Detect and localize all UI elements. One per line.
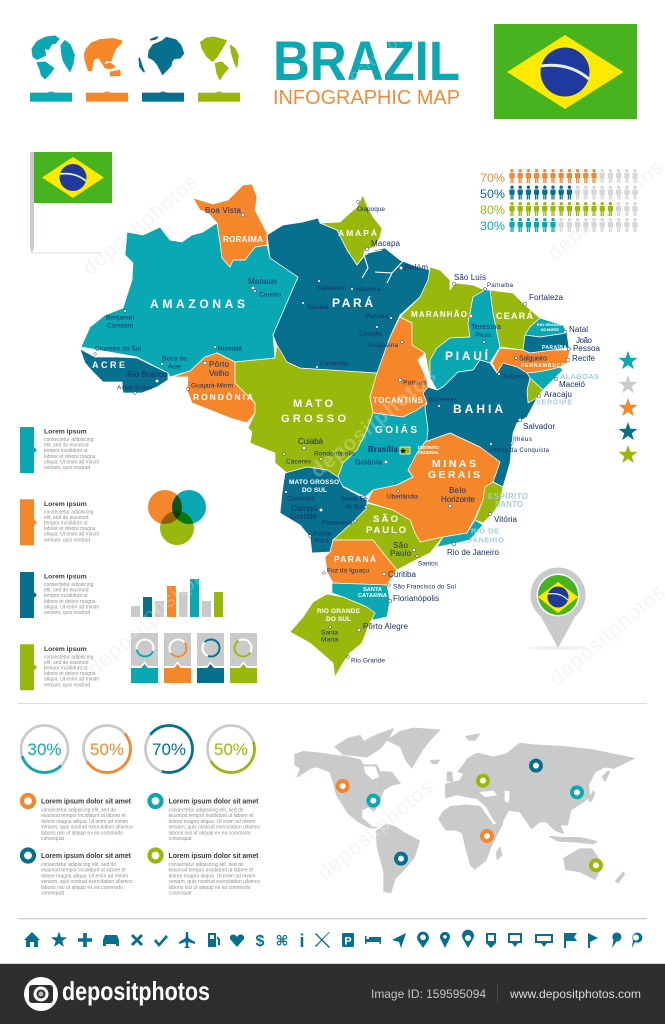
left legend items — [20, 427, 99, 690]
state: Maranhao — [400, 267, 485, 380]
state: Sergipe — [527, 378, 543, 403]
state labels: RORAIMA — [223, 235, 263, 244]
cities: Goiânia — [355, 458, 383, 466]
state labels: BAHIA — [453, 402, 503, 416]
item: dark blue: consectetur adipiscing — [44, 582, 94, 588]
state: Rondonia — [172, 353, 255, 423]
cities: Macapa — [371, 239, 401, 248]
cities: Brasília — [368, 445, 399, 454]
state: Alagoas — [527, 367, 563, 390]
item: teal: tempor incididunt ut — [44, 448, 88, 454]
donut: 50% — [74, 716, 140, 782]
cities: João — [576, 336, 593, 345]
state labels: DO NORTE — [541, 328, 559, 332]
cities: Altamira — [356, 287, 381, 293]
icon: pin round — [612, 933, 621, 948]
block: teal: eiusmod tempor incididunt ut labore et — [168, 813, 254, 819]
coastal state labels: ESPÍRITO — [488, 492, 528, 501]
row 30% — [480, 218, 638, 233]
state labels: MARANHÃO — [411, 310, 467, 319]
cities: Oiapoque — [357, 206, 385, 213]
card: orange — [164, 633, 191, 683]
state: Ceara — [490, 290, 540, 350]
cities: Panorama — [322, 520, 352, 526]
cities: Salvador — [523, 422, 555, 431]
item: green — [20, 644, 99, 690]
rivers — [362, 250, 403, 643]
state: Amapa — [320, 195, 382, 265]
watermarks on white: depositphotos — [78, 170, 203, 280]
state labels: TOCANTINS — [373, 396, 424, 405]
venn diagram — [148, 490, 206, 545]
item: green: Lorem ipsum — [44, 646, 87, 653]
cities: Recife — [572, 354, 596, 363]
state labels: RONDÔNIA — [193, 391, 253, 402]
item: orange — [20, 499, 99, 545]
item: green: tempor incididunt ut — [44, 666, 88, 672]
watermarks over artwork — [118, 19, 442, 885]
cities: Maceió — [559, 380, 586, 389]
state labels: PAULO — [366, 525, 406, 536]
state: Bahia — [423, 360, 537, 487]
cities: Salgueiro — [519, 356, 547, 362]
icon: cross — [131, 934, 143, 946]
states — [80, 184, 570, 677]
watermarks over artwork: depositphotos — [118, 535, 243, 645]
state labels: ACRE — [92, 360, 125, 370]
state: Para — [267, 218, 430, 373]
logo text: depositphotos — [62, 976, 210, 1006]
cities: São — [393, 541, 409, 550]
item: orange: elit, sed do eiusmod — [44, 515, 89, 521]
location rings — [338, 761, 601, 870]
block: green: Lorem ipsum dolor sit amet — [168, 853, 259, 860]
state: Tocantins — [370, 317, 428, 417]
item: dark blue: elit, sed do eiusmod — [44, 588, 89, 594]
globe: orange — [85, 39, 128, 102]
cities: Parnaíba — [487, 283, 514, 289]
donut: 50% green — [201, 719, 261, 779]
icon: callout wide — [535, 934, 553, 947]
cities: Paulo — [390, 549, 412, 558]
state: Amazonas — [81, 223, 298, 377]
map stars legend — [618, 351, 638, 463]
block: orange: Lorem ipsum dolor sit amet — [41, 798, 132, 806]
block: teal: dolore magna aliqua. Ut enim ad minim — [168, 819, 256, 825]
cities: Grande — [290, 512, 318, 521]
item: teal: labore et dolore magna — [44, 454, 96, 460]
block: dark blue: dolore magna aliqua. Ut enim ad minim — [41, 873, 128, 879]
cities: Florianópolis — [393, 594, 439, 603]
icon: pin target — [462, 930, 474, 948]
block: green: eiusmod tempor incididunt ut labore et — [168, 868, 254, 874]
state labels: GERAIS — [428, 469, 480, 481]
item: green: aliqua. Ut enim ad minim — [44, 677, 99, 683]
ring cards — [131, 633, 257, 683]
item: teal: elit, sed do eiusmod — [44, 443, 89, 449]
icon: callout tall — [486, 933, 496, 948]
block: teal: consequat — [168, 836, 192, 842]
cities: Foz do Iguaçu — [327, 568, 369, 574]
block: orange: consectetur adipiscing elit, sed do — [41, 808, 116, 814]
cities: Uberlândia — [387, 494, 418, 500]
state: Parana — [325, 540, 397, 585]
cities: São Francisco do Sul — [393, 584, 457, 590]
icon: bed — [365, 936, 381, 944]
state labels: DO SUL — [326, 616, 351, 623]
state: Mato Grosso — [235, 345, 377, 477]
cities: Belém — [404, 263, 428, 272]
icon: home — [24, 932, 40, 947]
state labels: DO SUL — [302, 487, 327, 494]
block: orange: eiusmod tempor incididunt ut labore et — [41, 813, 126, 819]
block: dark blue: eiusmod tempor incididunt ut labore et — [41, 868, 126, 874]
block: orange: consequat — [41, 836, 65, 842]
cities: Benjamin — [106, 314, 134, 322]
row 70%: 70% — [480, 173, 505, 185]
icon: parking: P — [344, 936, 352, 948]
state labels: GOIÁS — [375, 423, 417, 436]
block: green: veniam, quis nostrud exercitation ullamco — [168, 879, 260, 885]
item: green: veniam, quis nostrud — [44, 682, 90, 688]
cities: Porã — [315, 538, 329, 544]
coastal state labels: JANEIRO — [468, 536, 504, 544]
item: green: elit, sed do eiusmod — [44, 660, 89, 666]
icon: info: i — [299, 931, 305, 951]
cities: São Luís — [454, 273, 486, 282]
cities: Boa Vista — [205, 206, 242, 215]
item: dark blue: tempor incididunt ut — [44, 593, 88, 599]
icon: pin small — [440, 932, 450, 948]
cities: Cruzeiro do Sul — [95, 346, 142, 352]
state: Rio de Janeiro — [437, 520, 483, 547]
block: teal: laboris nisi ut aliquip ex ea commodo — [168, 830, 251, 836]
cities: Barreiras — [429, 396, 458, 404]
state: Roraima — [193, 184, 267, 267]
state labels: SÃO — [373, 514, 398, 525]
state labels: MATO GROSSO — [289, 479, 339, 486]
cities: Juàzeiro — [502, 374, 528, 380]
title: INFOGRAPHIC MAP — [273, 86, 460, 109]
icon: navigation arrow — [392, 933, 406, 948]
card: teal — [131, 633, 158, 683]
cities: Humaitá — [218, 346, 242, 352]
cities: Belo — [449, 486, 467, 495]
row 30%: 30% — [480, 221, 505, 233]
block: teal: Lorem ipsum dolor sit amet — [168, 798, 259, 806]
cities: Carajás — [359, 330, 383, 338]
state: Mato Grosso do Sul — [280, 467, 367, 553]
cities: Rio Grande — [351, 658, 385, 664]
icon: plane — [179, 932, 195, 948]
item: green: consectetur adipiscing — [44, 654, 94, 660]
icon: star — [51, 932, 67, 947]
cities: Vitória da Conquista — [489, 448, 550, 454]
block: green: consequat — [168, 890, 192, 896]
image id: Image ID: 159595094 — [371, 987, 486, 1001]
row 80%: 80% — [480, 205, 505, 217]
block: dark blue: laboris nisi ut aliquip ex ea commodo — [41, 885, 123, 891]
globe: green — [198, 37, 240, 102]
coastal state labels: ALAGOAS — [560, 372, 599, 381]
bar chart — [131, 579, 223, 617]
block: teal: consectetur adipiscing elit, sed do — [168, 808, 244, 814]
item: teal: consectetur adipiscing — [44, 437, 94, 443]
state labels: PARAÍBA — [542, 343, 567, 351]
donut: 50%: 50% — [90, 740, 124, 759]
cities: Ilhéus — [513, 436, 533, 443]
item: teal — [20, 427, 99, 473]
item: dark blue: labore et dolore magna — [44, 599, 96, 605]
item: orange: aliqua. Ut enim ad minim — [44, 532, 99, 538]
cities: Cuiabá — [298, 437, 324, 446]
state labels: PARANÁ — [334, 554, 376, 564]
donut: 30% — [11, 716, 78, 782]
block: green: consectetur adipiscing elit, sed do — [168, 862, 244, 868]
state: Rio Grande do Sul — [290, 594, 375, 677]
icon: callout — [508, 933, 522, 947]
state: Sao Paulo — [333, 503, 443, 570]
item: green: labore et dolore magna — [44, 671, 96, 677]
globes row — [30, 36, 240, 102]
cities: Ponta — [313, 530, 331, 538]
cities: Acre — [168, 364, 181, 370]
state: Paraiba — [523, 333, 569, 353]
block: dark blue: veniam, quis nostrud exercitation ullamco — [41, 879, 133, 885]
state labels: SANTA — [363, 587, 382, 593]
item: orange: veniam, quis nostrud — [44, 537, 90, 543]
watermarks on white: depositphotos — [83, 570, 208, 680]
block: orange — [22, 795, 133, 842]
item: dark blue: veniam, quis nostrud — [44, 610, 90, 616]
state labels: MINAS — [432, 458, 476, 470]
item: teal: veniam, quis nostrud — [44, 465, 90, 471]
state labels: PIAUÍ — [445, 348, 489, 363]
cities: Guajará-Mirim — [191, 382, 233, 390]
block: orange: dolore magna aliqua. Ut enim ad minim — [41, 819, 128, 825]
state: Espirito Santo — [475, 482, 503, 523]
cities: Rondonópolis — [314, 450, 356, 458]
state labels — [92, 228, 567, 623]
cities: Campo — [291, 504, 318, 513]
block: green: dolore magna aliqua. Ut enim ad minim — [168, 873, 256, 879]
cities — [94, 200, 601, 664]
state: Piaui — [430, 290, 500, 390]
cities: Velho — [209, 369, 230, 378]
title: BRAZIL — [273, 29, 460, 92]
icon: flag waving — [564, 933, 577, 948]
icon: flag triangle — [588, 933, 598, 948]
state: Distrito Federal — [400, 447, 410, 454]
big flag — [494, 24, 637, 119]
state labels: GROSSO — [281, 413, 346, 425]
state: Minas Gerais — [367, 433, 500, 542]
icon: car — [103, 935, 119, 946]
cities: Assis Brasil — [117, 384, 153, 392]
map pin with flag — [528, 568, 588, 650]
coastal state labels — [468, 372, 599, 544]
icon: fuel — [208, 933, 220, 947]
cities: Manaus — [248, 277, 277, 286]
cities: Careiro — [259, 292, 281, 298]
small flag on pole — [30, 152, 112, 254]
item: dark blue: Lorem ipsum — [44, 574, 87, 580]
cities: Maraba — [365, 314, 389, 320]
globe: dark blue — [139, 37, 184, 102]
cities: Santos — [418, 560, 439, 568]
row 70% — [480, 169, 638, 185]
icon: plus — [78, 933, 92, 947]
donut: 30%: 30% — [27, 740, 62, 759]
cities: Fortaleza — [529, 293, 564, 302]
cities: Rio Branco — [127, 370, 168, 379]
block: orange: veniam, quis nostrud exercitation ullamco — [41, 825, 133, 831]
footer bar — [0, 963, 665, 1024]
donut: 70% — [136, 716, 202, 782]
cities: Picos — [475, 333, 491, 339]
coastal state labels: SANTO — [495, 500, 523, 509]
state labels: DISTRITO — [418, 445, 439, 451]
cities: Santarém — [317, 285, 346, 292]
item: teal: aliqua. Ut enim ad minim — [44, 459, 99, 465]
cities: Araguaína — [368, 343, 399, 349]
cities: Corumbá — [287, 496, 314, 502]
state: Pernambuco — [492, 348, 570, 373]
cities: Vitória — [494, 515, 518, 524]
watermarks on white — [78, 155, 665, 690]
cities: Santa Fé — [341, 496, 367, 502]
state labels: CEARÁ — [496, 311, 534, 321]
state: Goias — [338, 403, 428, 497]
card: dark blue — [197, 633, 224, 683]
block: green: laboris nisi ut aliquip ex ea commodo — [168, 885, 251, 891]
icon: capital star — [400, 448, 406, 454]
item: teal: Lorem ipsum — [44, 428, 87, 436]
icon row — [24, 930, 642, 951]
coastal state labels: SERGIPE — [536, 400, 572, 406]
people percent chart — [480, 169, 638, 233]
cities: Constant — [107, 322, 133, 330]
state labels: PARÁ — [332, 295, 373, 310]
state: Rio Grande do Norte — [525, 318, 567, 337]
watermarks on white: depositphotos — [543, 155, 665, 265]
world map — [295, 728, 634, 893]
donut: 70%: 70% — [152, 740, 186, 759]
card: green — [230, 633, 257, 683]
block: dark blue: consequat — [41, 890, 65, 896]
item: dark blue: aliqua. Ut enim ad minim — [44, 604, 99, 610]
cities: Natal — [569, 325, 588, 334]
website: www.depositphotos.com — [509, 987, 641, 1001]
block: teal: veniam, quis nostrud exercitation ullamco — [168, 825, 260, 831]
item: orange: consectetur adipiscing — [44, 509, 94, 515]
block: green — [150, 850, 260, 896]
cities: Itaituba — [307, 305, 329, 311]
logo mark — [24, 977, 58, 1011]
block: dark blue: Lorem ipsum dolor sit amet — [41, 853, 132, 860]
cities: Teresina — [471, 322, 502, 331]
globe: teal — [30, 36, 74, 102]
cities: Cachimbo — [320, 360, 349, 368]
block: dark blue — [22, 850, 133, 896]
icon: cutlery — [315, 932, 330, 948]
row 80% — [480, 202, 638, 217]
block: orange: laboris nisi ut aliquip ex ea commodo — [41, 830, 123, 836]
map of Brazil — [80, 184, 601, 677]
cities: Maria — [321, 636, 338, 644]
cities: Aracaju — [544, 390, 572, 399]
state: Santa Catarina — [332, 583, 390, 620]
row 50%: 50% — [480, 189, 505, 201]
item: orange: tempor incididunt ut — [44, 521, 88, 527]
cities: Curitiba — [388, 570, 417, 579]
icon: pin ring — [632, 933, 642, 948]
cities: Pôrto — [209, 360, 230, 369]
cities: Pessoa — [573, 344, 601, 353]
watermarks over artwork: depositphotos — [323, 19, 421, 104]
block: teal — [150, 795, 260, 842]
lorem text blocks — [22, 795, 260, 896]
cities: Rio de Janeiro — [447, 548, 500, 557]
watermarks over artwork: depositphotos — [313, 775, 438, 885]
icon: command: ⌘ — [276, 934, 288, 950]
icon: parking — [342, 933, 354, 948]
cities: do Sul — [345, 504, 364, 510]
block: dark blue: consectetur adipiscing elit, sed do — [41, 862, 116, 868]
icon: pin outline — [417, 932, 429, 948]
cities: Cáceres — [286, 458, 312, 466]
state labels: FEDERAL — [418, 450, 439, 456]
percent donuts — [11, 716, 261, 782]
donut: 50% green: 50% — [214, 740, 248, 759]
cities: Horizonte — [441, 495, 476, 504]
item: orange: labore et dolore magna — [44, 526, 96, 532]
state: Acre — [80, 349, 168, 393]
cities: Palmas — [403, 380, 427, 386]
row 50% — [480, 186, 638, 201]
icon: check — [154, 935, 168, 947]
item: dark blue — [20, 572, 99, 618]
state labels: CATARINA — [358, 593, 387, 599]
state labels: AMAZONAS — [150, 297, 245, 311]
cities: Boca do — [162, 356, 187, 362]
state labels: MATO — [293, 398, 333, 410]
icon: heart — [230, 935, 244, 947]
state labels: PERNAMBUCO — [521, 363, 565, 369]
state labels: RIO GRANDE — [537, 323, 562, 327]
state labels: AMAPÁ — [338, 228, 377, 238]
cities: Pôrto Alegre — [363, 622, 409, 631]
item: orange: Lorem ipsum — [44, 501, 87, 508]
icon: dollar: $ — [256, 933, 265, 950]
state labels: RIO GRANDE — [317, 608, 361, 615]
coastal state labels: RIO DE — [471, 526, 499, 536]
watermarks over artwork: depositphotos — [306, 364, 442, 482]
cities: Santa — [321, 630, 338, 636]
